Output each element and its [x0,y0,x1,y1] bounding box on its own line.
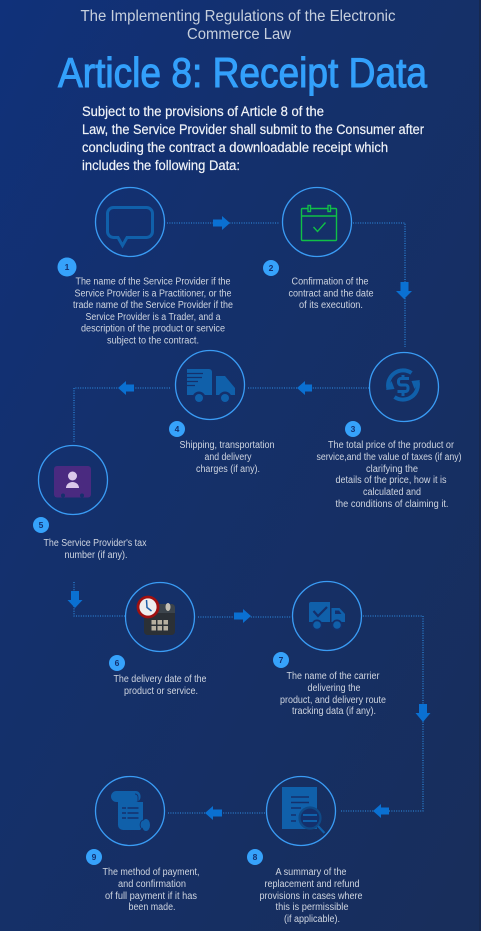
connector: step 8 to 9 [168,806,265,820]
connector: step 1 to 2 [167,216,279,230]
description 6: product or service. [124,686,198,697]
description 1: trade name of the Service Provider if the [73,300,233,311]
step 3: 3 [351,424,356,434]
description 7: tracking data (if any). [292,706,376,717]
step 8 [247,776,363,925]
description 7: product, and delivery route [280,695,387,706]
description 1: description of the product or service [81,324,226,334]
description 3: the conditions of claiming it. [336,499,448,510]
description 2: Confirmation of the [292,276,369,288]
description 9: been made. [128,902,176,913]
intro text block [82,104,424,174]
step 9 [86,776,200,913]
description 9: and confirmation [118,879,186,890]
step 3 [316,352,462,510]
connector: step 5 to 6 [68,582,125,616]
icon: delivery truck [187,369,235,404]
intro text block: concluding the contract a downloadable receipt which [82,140,388,156]
step 6: 6 [115,658,120,668]
description 1: Service Provider is a Trader, and a [86,312,221,323]
description 8: this is permissible [276,902,349,913]
intro text block: includes the following Data: [82,158,240,174]
description 3: service,and the value of taxes (if any) [316,452,462,463]
description 2 [288,276,374,311]
description 8: provisions in cases where [260,891,363,902]
icon: document with magnifier [282,787,324,833]
step 4 [169,350,274,475]
description 8: A summary of the [276,867,347,878]
step 6 [109,582,207,697]
description 3: clarifying the [366,464,419,475]
description 7: delivering the [308,683,361,694]
description 9: of full payment if it has [105,891,197,902]
description 4: and delivery [204,452,252,463]
step 2 [263,188,374,311]
icon: tax card [54,466,91,498]
step 5 [33,446,147,561]
description 4 [180,440,274,475]
description 4: charges (if any). [196,464,260,475]
description 2: of its execution. [299,300,363,311]
description 4: Shipping, transportation [180,440,274,451]
description 8 [260,867,363,925]
icon: dollar refresh [386,370,420,400]
description 1: subject to the contract. [107,336,199,346]
description 9: The method of payment, [102,867,200,878]
connector: step 3 to 4 [247,381,369,395]
heading: Article 8: Article 8: Receipt Data [58,49,428,96]
description 8: (if applicable). [284,914,340,925]
description 6 [114,674,207,697]
icon: green calendar [302,206,336,240]
step 7: 7 [279,655,284,665]
icon: speech bubble [108,208,152,246]
description 7 [280,671,387,717]
step 9: 9 [92,852,97,862]
description 9 [102,867,200,913]
connector: step 6 to 7 [198,609,291,623]
step 8: 8 [253,852,258,862]
step 2: 2 [269,263,274,273]
description 3: details of the price, how it is [336,475,447,486]
description 8: replacement and refund [264,879,360,890]
step 5: 5 [39,520,44,530]
icon: scroll list [111,791,150,831]
step 1: 1 [65,262,70,272]
description 1: Service Provider is a Practitioner, or the [74,288,232,300]
description 5: The Service Provider's tax [44,538,147,549]
description 2: contract and the date [288,288,374,300]
connector: step 7 to 8 [340,616,430,818]
description 1: The name of the Service Provider if the [76,276,231,288]
description 7: The name of the carrier [286,671,380,682]
icon: truck with check [309,602,345,630]
connector: step 4 to 5 [74,381,170,442]
step 7 [273,582,387,717]
description 3: The total price of the product or [328,440,455,451]
step 1 [58,188,233,346]
title: regulation name: Commerce Law [187,26,292,43]
icon: calendar and clock [138,597,175,635]
description 5: number (if any). [64,550,128,561]
title: regulation name [80,8,396,43]
description 1 [73,276,233,346]
description 5 [44,538,147,561]
description 3: calculated and [363,487,421,498]
title: regulation name: The Implementing Regulations of the Electronic [80,8,396,25]
description 6: The delivery date of the [114,674,207,685]
intro text block: Law, the Service Provider shall submit to the Consumer after [82,122,424,138]
connector: step 2 to 3 [353,223,412,347]
step 4: 4 [175,424,180,434]
intro text block: Subject to the provisions of Article 8 of the [82,104,324,120]
description 3 [316,440,462,510]
